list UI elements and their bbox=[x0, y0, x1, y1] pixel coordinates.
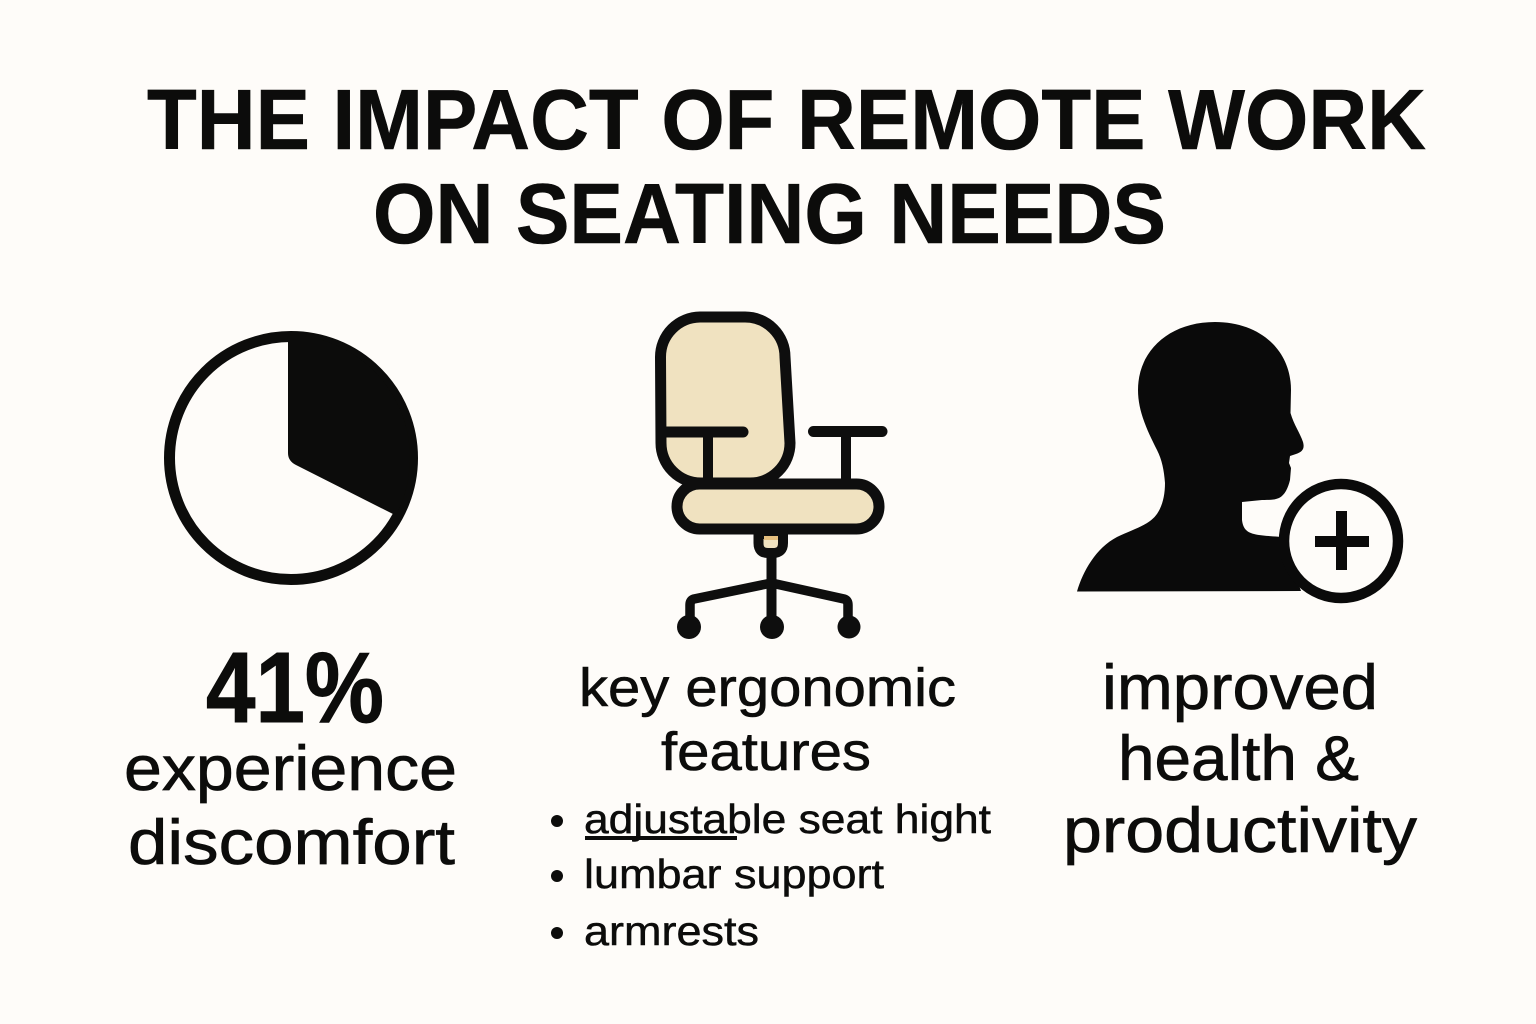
heading: key ergonomic features: key ergonomic bbox=[579, 658, 956, 718]
heading: key ergonomic features bbox=[579, 658, 956, 782]
icon: pie chart 41% bbox=[170, 335, 412, 580]
list: ergonomic features: armrests bbox=[584, 908, 759, 954]
stat: 41% experience discomfort: discomfort bbox=[128, 808, 456, 878]
stat: 41% experience discomfort: experience bbox=[124, 734, 457, 804]
text: improved health and productivity bbox=[1063, 653, 1418, 866]
title bbox=[147, 73, 1426, 262]
title: THE IMPACT OF REMOTE WORK bbox=[147, 73, 1426, 168]
list: ergonomic features bbox=[551, 796, 992, 954]
heading: key ergonomic features: features bbox=[661, 722, 871, 782]
icon: office chair bbox=[660, 317, 882, 639]
text: improved health and productivity: health & bbox=[1118, 724, 1359, 794]
stat: 41% experience discomfort: 41% bbox=[206, 632, 384, 744]
title: ON SEATING NEEDS bbox=[373, 167, 1166, 262]
stat: 41% experience discomfort bbox=[124, 632, 457, 878]
text: improved health and productivity: productivity bbox=[1063, 796, 1418, 866]
list: ergonomic features: adjustable seat hight bbox=[584, 796, 992, 842]
icon: head silhouette with plus bbox=[1077, 322, 1398, 598]
text: improved health and productivity: improved bbox=[1102, 653, 1378, 723]
list: ergonomic features: lumbar support bbox=[584, 851, 885, 897]
